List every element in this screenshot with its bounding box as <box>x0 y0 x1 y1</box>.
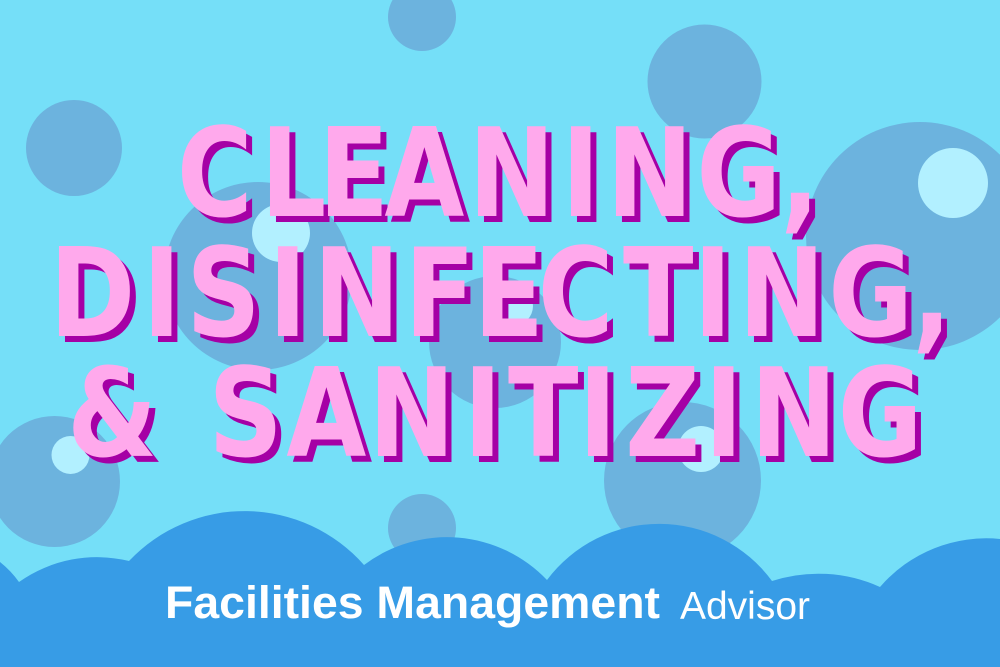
brand suffix: Advisor <box>680 585 810 628</box>
title line 2: DISINFECTING, <box>49 222 951 365</box>
cloud band <box>0 511 1000 667</box>
brand logo text <box>165 577 810 628</box>
title line 1: CLEANING, <box>183 108 826 251</box>
title <box>49 102 957 491</box>
title line 2: DISINFECTING, <box>55 228 957 371</box>
title line 1: CLEANING, <box>177 102 820 245</box>
brand name: Facilities Management <box>165 577 660 628</box>
title line 3: & SANITIZING <box>73 348 929 491</box>
title line 3: & SANITIZING <box>67 342 923 485</box>
